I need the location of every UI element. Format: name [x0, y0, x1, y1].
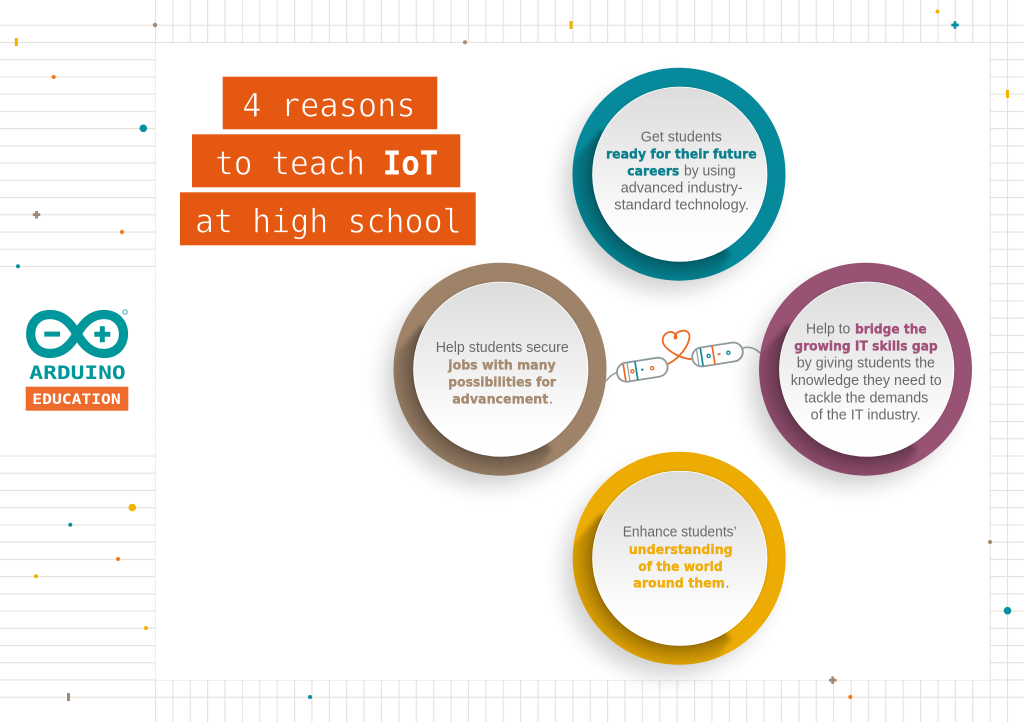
yellow circle text: .: [726, 576, 730, 592]
teal circle text: standard technology.: [614, 198, 749, 214]
brown circle text: .: [549, 391, 553, 407]
teal circle text: [606, 130, 757, 214]
right plug: [691, 341, 744, 368]
teal circle text: by using: [684, 164, 736, 180]
left plug: [616, 356, 669, 383]
teal circle text: advanced industry-: [621, 181, 743, 197]
panel: plum circle, IT skills gap: [742, 262, 972, 495]
title line 3: at high school: [195, 201, 462, 240]
connector: two plugs with heart wire: [606, 331, 760, 383]
yellow circle text: around them: [633, 576, 725, 592]
yellow circle text: [623, 524, 737, 592]
panel: yellow circle, understanding the world: [556, 452, 786, 684]
teal circle text: ready for their future: [606, 146, 757, 162]
icon: infinity symbol: [31, 310, 127, 354]
yellow circle text: understanding: [629, 542, 733, 558]
logo: Arduino Education: [26, 310, 128, 411]
title block: [180, 77, 476, 245]
plum circle text: by giving students the: [797, 356, 935, 372]
panel: brown circle, job possibilities: [376, 262, 606, 495]
plum circle text: of the IT industry.: [811, 407, 921, 423]
brown circle text: possibilities for: [448, 375, 556, 391]
teal circle text: careers: [627, 164, 679, 180]
plum circle text: bridge the: [855, 322, 927, 338]
right gray wire: [743, 347, 760, 353]
education badge: EDUCATION: [32, 392, 121, 408]
title line 1: [223, 77, 437, 129]
plum circle text: Help to: [806, 322, 850, 338]
title line 2: IoT: [383, 143, 438, 182]
left gray wire: [606, 372, 618, 381]
plum circle text: growing IT skills gap: [794, 339, 938, 355]
plum circle text: knowledge they need to: [791, 373, 942, 389]
brown circle text: advancement: [452, 391, 549, 407]
title line 3: [180, 192, 476, 245]
title line 2: to teach: [215, 143, 365, 182]
plum circle text: [791, 322, 942, 423]
title line 1: 4 reasons: [242, 86, 416, 125]
wordmark: ARDUINO: [29, 363, 126, 384]
title line 2: [192, 134, 460, 187]
yellow circle text: of the world: [638, 559, 723, 575]
brown circle text: jobs with many: [447, 357, 556, 373]
plum circle text: tackle the demands: [804, 390, 928, 406]
brown circle text: [436, 340, 569, 407]
brown circle text: Help students secure: [436, 340, 569, 356]
teal circle text: Get students: [641, 130, 722, 146]
yellow circle text: Enhance students’: [623, 524, 737, 540]
panel: teal circle, future careers: [555, 68, 786, 300]
heart wire: [663, 331, 692, 364]
